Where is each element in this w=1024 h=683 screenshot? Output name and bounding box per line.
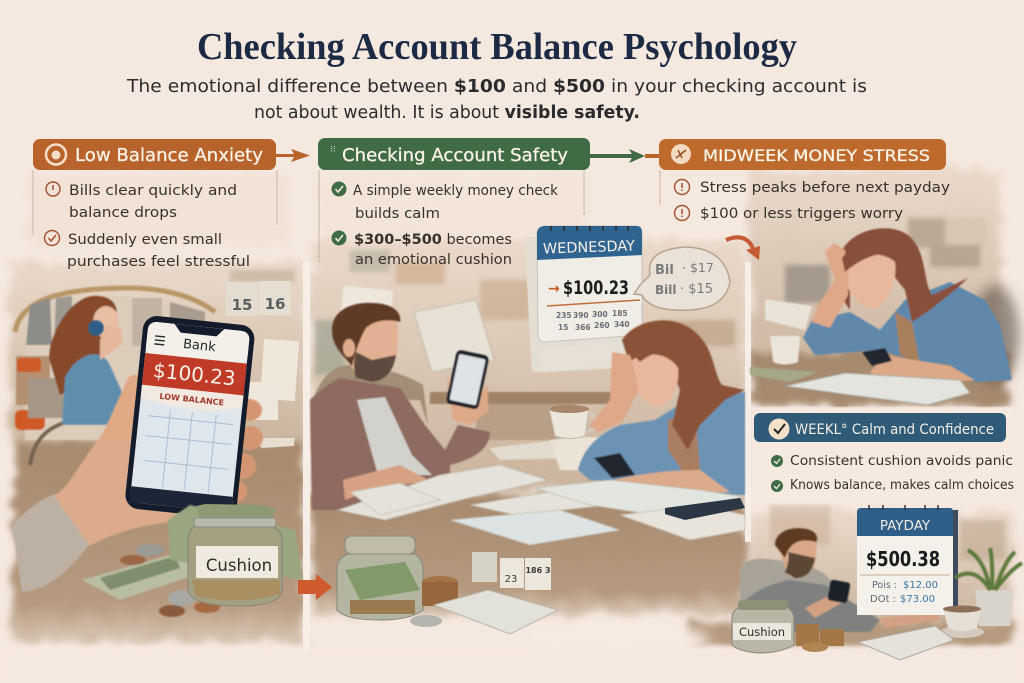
phone: bank balance: LOW BALANCE: [159, 392, 224, 407]
cash under jar: [82, 505, 303, 617]
scene: woman on phone by car: [15, 288, 215, 465]
speech bubble: bills: Bill: [655, 283, 676, 297]
cup: [549, 405, 597, 438]
calendar: payday: PAYDAY: [880, 518, 931, 534]
jar and coins: cushion: [732, 600, 954, 660]
bullet: small purchases: [44, 230, 250, 270]
papers on desk: [338, 465, 745, 545]
jar: cushion: Cushion: [206, 556, 272, 575]
arrow to safety: [276, 149, 310, 162]
banner: weekly calm and confidence: WEEKL° Calm and Confidence: [795, 422, 994, 438]
calendar: Wednesday: 235: [556, 311, 572, 320]
calendar: payday: Pois :: [872, 580, 897, 591]
calendar: Wednesday: 260: [594, 321, 610, 330]
sofa: [740, 559, 835, 625]
jar: cushion: [188, 504, 282, 606]
bullet: knows balance: Knows balance, makes calm choices: [790, 478, 1014, 493]
coffee cup: [940, 606, 984, 638]
bullet: emotional cushion: [332, 230, 512, 268]
bullet: emotional cushion: $300–$500 becomes: [354, 232, 512, 248]
woman reading phone: [803, 228, 1012, 392]
bullet: weekly check: builds calm: [355, 206, 440, 222]
banner: checking account safety: Checking Account Safety: [342, 146, 568, 166]
banner: checking account safety: [318, 138, 590, 170]
panel: checking account safety: [298, 138, 745, 634]
calendar: Wednesday: 366: [575, 323, 591, 332]
bullet: stress peaks: Stress peaks before next payday: [700, 180, 950, 196]
papers and cup: [750, 299, 970, 405]
small date cards: 186 3: [525, 566, 551, 575]
bullet: weekly check: A simple weekly money check: [353, 183, 559, 199]
banner: midweek money stress: MIDWEEK MONEY STRESS: [703, 146, 930, 165]
phone: bank balance: $100.23: [152, 358, 237, 390]
banner: midweek money stress: [659, 139, 946, 170]
arrow into jar: [298, 574, 332, 600]
bullet: small purchases: purchases feel stressful: [67, 254, 250, 270]
bullet: emotional cushion: an emotional cushion: [355, 252, 512, 268]
woman head in hand: [578, 320, 745, 497]
small date cards: [434, 552, 558, 634]
calendar: Wednesday: 300: [592, 310, 608, 319]
scene: wall calendar 15 16: 15: [232, 296, 252, 314]
scene: background table and papers: [341, 285, 650, 472]
calendar: payday: $500.38: [866, 547, 940, 571]
bullet: $100 or less: $100 or less triggers worry: [700, 206, 903, 222]
scene: background shelves: [785, 218, 987, 303]
calendar: Wednesday: $100.23: [563, 277, 629, 299]
phone: bank balance: Bank: [182, 337, 217, 355]
scene: wall calendar 15 16: [226, 281, 299, 448]
speech bubble: bills: · $17: [682, 260, 714, 275]
banner: low balance anxiety: Low Balance Anxiety: [75, 146, 263, 166]
calendar: Wednesday: WEDNESDAY: [543, 238, 635, 258]
calendar: payday: DOt :: [870, 594, 896, 605]
calendar: Wednesday: 340: [614, 320, 630, 329]
bullet: bills clear: [46, 182, 237, 221]
bullet: bills clear: Bills clear quickly and: [69, 183, 237, 199]
calendar: Wednesday: [525, 226, 642, 373]
panel: weekly calm and confidence: [732, 407, 1022, 660]
subtitle: not about wealth. It is about visible safety.: [254, 102, 640, 123]
background building blocks: [230, 250, 1005, 560]
small date cards: 23: [505, 574, 517, 585]
speech bubble: bills: [634, 247, 730, 310]
calculator: [665, 498, 745, 520]
bullet: bills clear: balance drops: [69, 205, 177, 221]
arrow to midweek: [590, 149, 659, 163]
bullet: consistent cushion: Consistent cushion avoids panic: [790, 454, 1013, 469]
bullet: weekly check: [332, 182, 559, 222]
bullet: small purchases: Suddenly even small: [68, 232, 222, 248]
subtitle: [126, 76, 867, 123]
speech bubble: bills: Bil: [655, 263, 674, 278]
calendar: payday: $73.00: [900, 594, 935, 605]
panel: midweek money stress: [659, 139, 1012, 405]
subtitle: The emotional difference between $100 and $500 in your checking account is: [126, 76, 867, 97]
jar and coins: cushion: Cushion: [739, 625, 785, 639]
calendar: payday: $12.00: [903, 580, 938, 591]
curved arrow: [726, 237, 760, 260]
title: Checking Account Balance Psychology: [197, 26, 797, 68]
calendar: payday: [857, 505, 958, 615]
backing panel: [752, 407, 1014, 503]
calendar: Wednesday: 185: [612, 309, 628, 318]
panel: low balance anxiety: [12, 139, 310, 617]
banner: weekly calm and confidence: [754, 413, 1006, 442]
phone: bank balance: [124, 315, 256, 519]
panel dividers: [303, 262, 751, 650]
scene: wall calendar 15 16: 16: [265, 295, 285, 313]
man with phone: [310, 303, 490, 510]
banner: checking account safety: ⁝⁝: [330, 145, 336, 155]
painted scene backdrops: [0, 170, 1024, 683]
calendar: Wednesday: →: [548, 281, 560, 297]
hand and sleeve: [12, 374, 263, 592]
calendar: Wednesday: 15: [558, 323, 568, 332]
jar and coins: [337, 536, 458, 627]
man relaxing: [740, 528, 940, 632]
plant: [955, 548, 1022, 626]
calendar: Wednesday: 390: [573, 311, 589, 320]
speech bubble: bills: · $15: [680, 282, 713, 297]
banner: low balance anxiety: [33, 139, 276, 170]
